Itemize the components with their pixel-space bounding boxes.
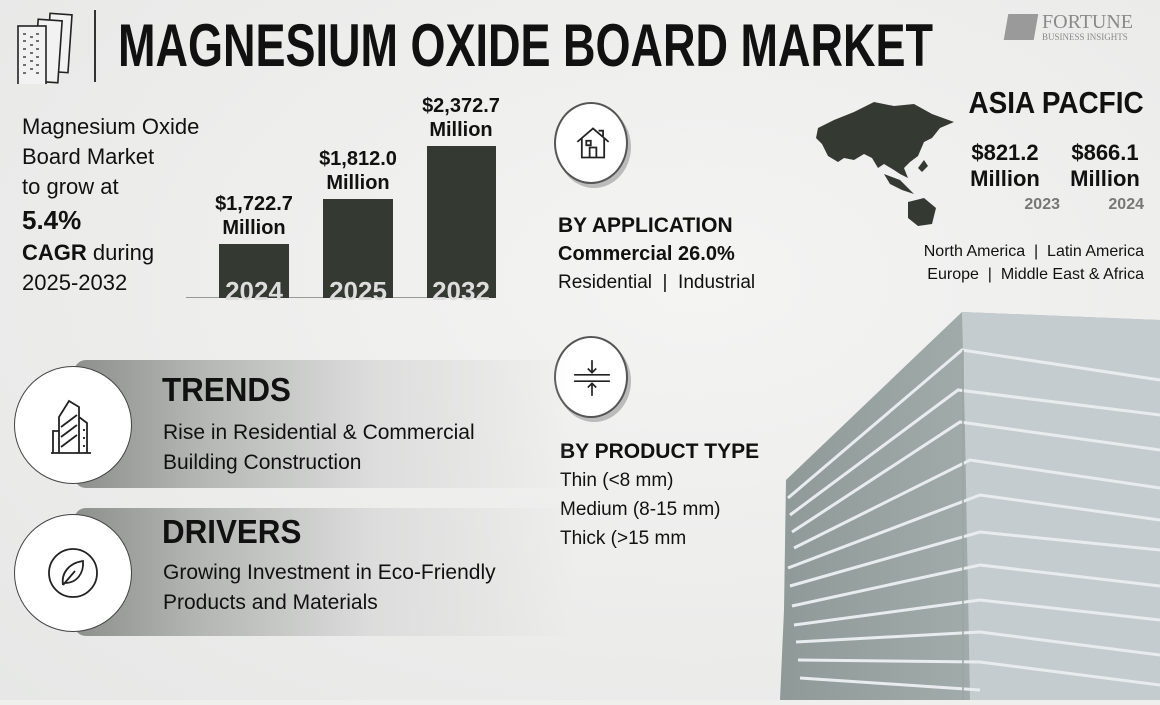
text: other regions — [924, 243, 1144, 283]
bar chart: $1,722.7 — [215, 193, 293, 215]
logo: Fortune Business Insights: BUSINESS INSIGHTS — [1042, 32, 1128, 42]
bar chart: Million — [326, 172, 390, 194]
panel: trends: Building Construction — [163, 451, 361, 474]
panel: drivers: DRIVERS — [162, 513, 301, 550]
text: CAGR block: Board Market — [22, 144, 154, 169]
bar chart: $1,812.0 — [319, 148, 397, 170]
text: by application: BY APPLICATION — [558, 214, 733, 237]
bar chart — [186, 95, 500, 302]
icon: building — [14, 366, 132, 484]
logo: Fortune Business Insights — [1004, 11, 1133, 42]
icon: product thickness — [554, 336, 628, 418]
logo: Fortune Business Insights: FORTUNE — [1042, 11, 1133, 33]
image: board stack — [780, 312, 1160, 700]
panel: trends: Rise in Residential & Commercial — [163, 421, 475, 444]
bar chart: Million — [222, 217, 286, 239]
bar 2025 — [323, 199, 393, 298]
text: by application — [558, 214, 755, 293]
text: CAGR block: to grow at — [22, 174, 119, 199]
text: asia pacific values: Million — [970, 166, 1040, 191]
panel: drivers: Products and Materials — [163, 591, 378, 614]
icon: boards — [17, 12, 73, 84]
text: asia pacific values: $866.1 — [1071, 140, 1139, 165]
text: by product type: BY PRODUCT TYPE — [560, 440, 759, 463]
panel: drivers: Growing Investment in Eco-Friendly — [163, 561, 496, 584]
map: asia pacific — [816, 102, 954, 226]
text: by application: Residential | Industrial — [558, 272, 755, 293]
panel: trends: TRENDS — [162, 371, 291, 408]
text: other regions: North America | Latin America — [924, 243, 1144, 260]
text: asia pacific values — [969, 85, 1144, 213]
text: by application: Commercial 26.0% — [558, 243, 735, 265]
text: CAGR block: CAGR during — [22, 240, 154, 265]
bar chart: $2,372.7 — [422, 95, 500, 117]
text: CAGR block: Magnesium Oxide — [22, 114, 199, 139]
bar chart: Million — [429, 119, 493, 141]
bar 2032 — [427, 146, 496, 298]
text: asia pacific values: 2024 — [1108, 196, 1144, 213]
panel: trends — [14, 360, 566, 488]
icon: leaf — [14, 514, 132, 632]
text: asia pacific values: 2023 — [1024, 196, 1060, 213]
text: other regions: Europe | Middle East & Africa — [927, 266, 1144, 283]
text: asia pacific values: $821.2 — [971, 140, 1039, 165]
text: asia pacific values: ASIA PACFIC — [969, 85, 1144, 120]
panel: drivers — [14, 508, 566, 636]
text: by product type: Thick (>15 mm — [560, 528, 686, 549]
text: CAGR block — [22, 114, 199, 295]
text: by product type: Medium (8-15 mm) — [560, 499, 720, 520]
text: by product type — [560, 440, 759, 549]
icon: application house — [554, 102, 628, 184]
text: CAGR block: 5.4% — [22, 205, 81, 235]
text: CAGR block: 2025-2032 — [22, 270, 127, 295]
bar 2024 — [219, 244, 289, 298]
title: MAGNESIUM OXIDE BOARD MARKET — [118, 12, 933, 79]
text: asia pacific values: Million — [1070, 166, 1140, 191]
text: by product type: Thin (<8 mm) — [560, 470, 674, 491]
divider — [94, 10, 96, 82]
